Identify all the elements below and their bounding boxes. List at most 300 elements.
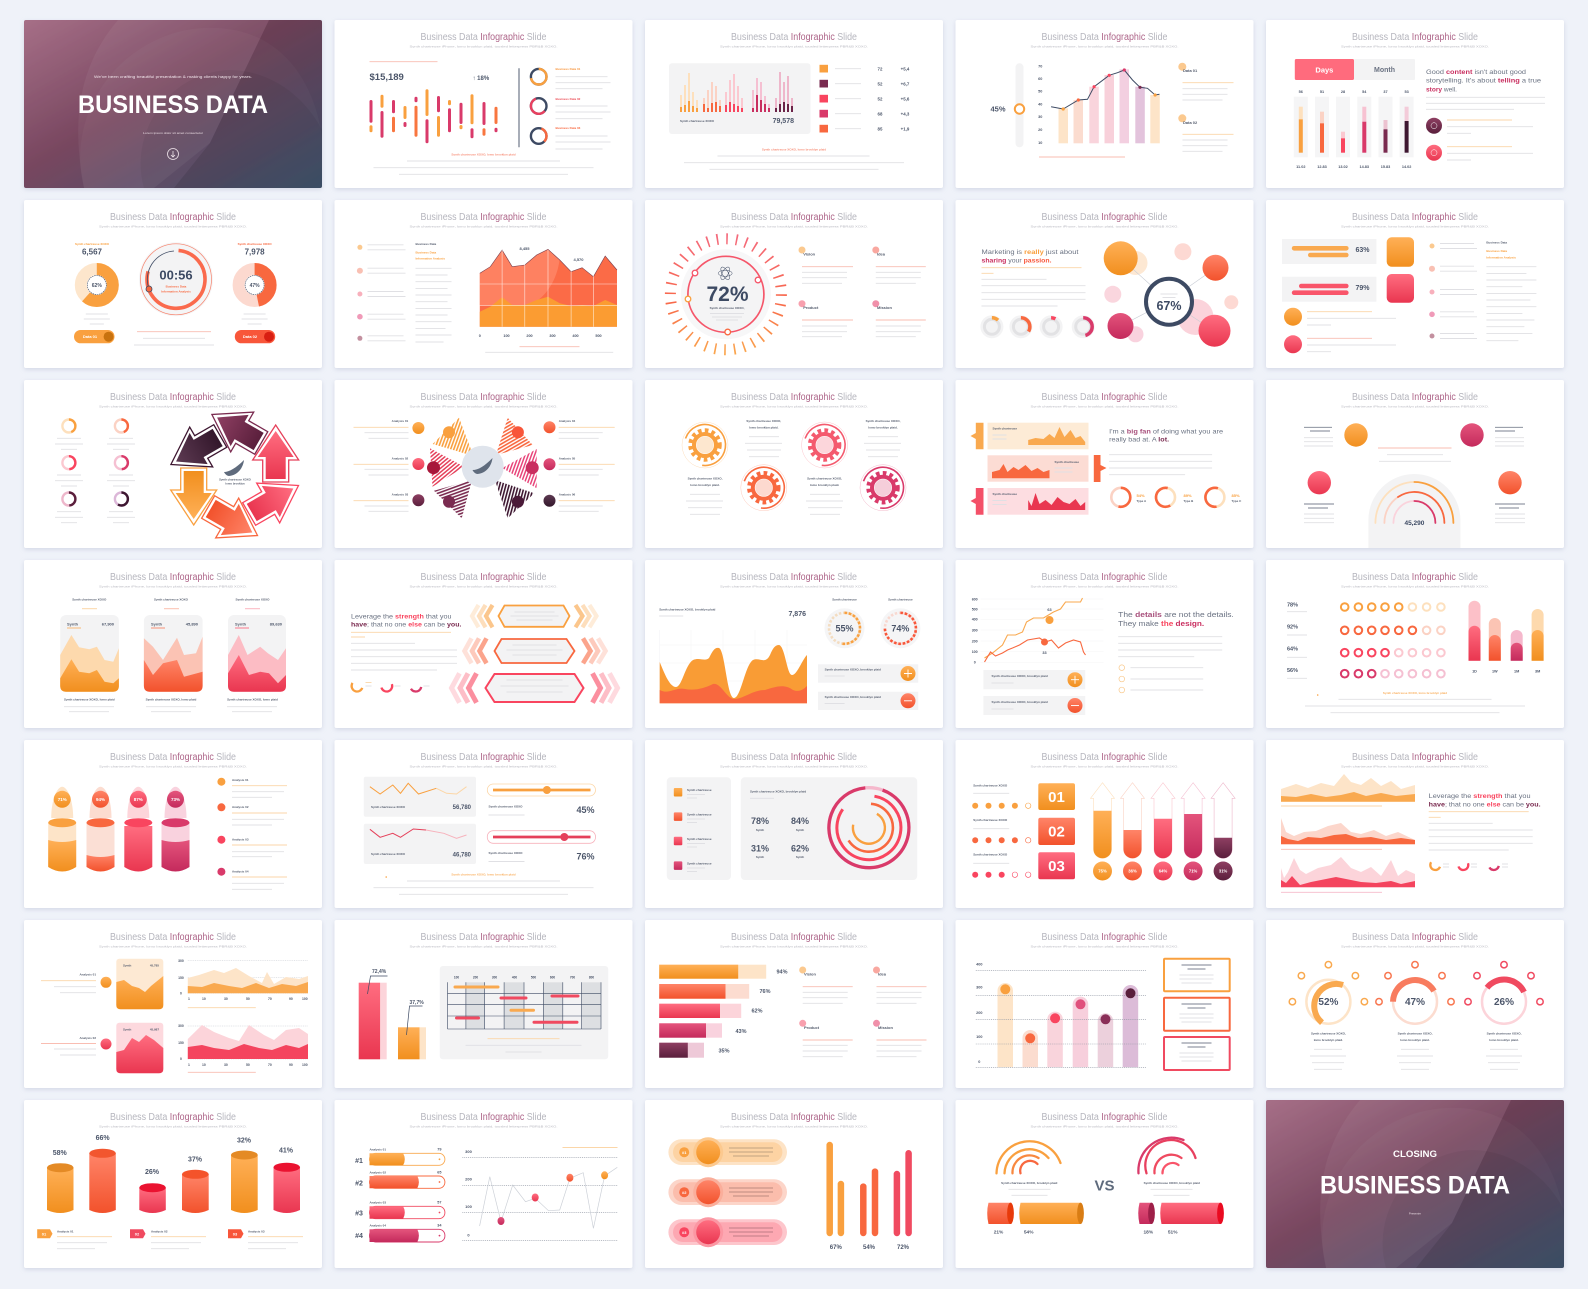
minus card: Synth chartreuse XOXO, brooklyn plaid (825, 695, 881, 699)
caption right: Synth chartreuse XOXO, brooklyn plaid (1144, 1181, 1200, 1185)
heading (99, 752, 247, 768)
striped triangles (427, 418, 539, 518)
area chart red: 1 (188, 1063, 190, 1067)
title: BUSINESS DATA (78, 91, 268, 119)
heading: Business Data Infographic Slide (420, 752, 547, 763)
legend card: Synth chartreuse (687, 788, 712, 792)
body text (1118, 637, 1222, 657)
area row coral (1281, 818, 1415, 849)
gauge 47% (1376, 962, 1454, 1024)
legend 03: 03 (233, 1232, 238, 1236)
heading (410, 752, 558, 768)
horizontal bar chart: 62% (751, 1009, 763, 1015)
panel: slide 33 pills and bar pairs (645, 1100, 943, 1268)
box text (1180, 965, 1214, 1061)
line chart: 500 (972, 607, 978, 611)
legend text (556, 67, 610, 149)
legend: data 01 (1178, 63, 1234, 100)
captions: lomo brooklyn plaid. (1489, 1038, 1519, 1042)
slider 76% (487, 831, 596, 862)
line chart: 200 (465, 1176, 473, 1182)
panel: slide 7 area chart (334, 200, 632, 368)
legend 01 (37, 1229, 112, 1249)
legend card: Synth chartreuse (687, 837, 712, 841)
heading: Business Data Infographic Slide (731, 752, 857, 763)
panel: slide 15 semicircle 45,290 (1266, 380, 1564, 548)
block: mission: Mission (878, 1025, 893, 1030)
legend 02: 02 (135, 1232, 140, 1236)
bar chart (1468, 601, 1544, 674)
cylinders left (987, 1203, 1084, 1224)
heading (99, 212, 247, 228)
percentage labels: 64% (1287, 647, 1298, 653)
icon list (1429, 244, 1477, 338)
table of values: 52 (878, 82, 883, 86)
gauge 47%: 47% (1405, 997, 1425, 1008)
bar chart with callouts: 37,7% (410, 1000, 424, 1006)
bar chart with callouts: 72,4% (372, 969, 387, 975)
values (994, 1230, 1178, 1236)
row 02: Synth chartreuse XOXO (973, 818, 1008, 822)
percentage badges: 75% (1098, 868, 1107, 874)
chart title (659, 608, 806, 618)
heading: Synth chartreuse iPhone, lomo brooklyn plaid, tousled letterpress PBR&B XOXO. (410, 404, 558, 408)
legend: analysis list: Analysis 02 (232, 805, 249, 809)
card red: 89,630 (270, 622, 283, 626)
percentage badges (1093, 862, 1233, 880)
bar pairs: 54% (863, 1245, 876, 1251)
percentage badges: 31% (1219, 868, 1228, 874)
axis labels (1038, 64, 1042, 145)
heading (410, 212, 558, 228)
heading: Business Data Infographic Slide (110, 752, 236, 763)
stats and rings card: 31% (751, 844, 769, 854)
bar chart: 0 (978, 1060, 980, 1064)
horizontal bar chart: 35% (718, 1048, 730, 1054)
bar pairs: 67% (830, 1245, 842, 1251)
heading (720, 212, 868, 228)
table of values: 72 (878, 66, 883, 72)
heading: Synth chartreuse iPhone, lomo brooklyn plaid, tousled letterpress PBR&B XOXO. (410, 584, 558, 588)
heading: Synth chartreuse iPhone, lomo brooklyn plaid, tousled letterpress PBR&B XOXO. (720, 44, 868, 48)
area chart: 500 (595, 334, 602, 338)
chevron row red (452, 673, 618, 703)
line chart: 600 (972, 597, 978, 601)
radial gauge (670, 239, 781, 350)
heading: Business Data Infographic Slide (420, 1112, 547, 1123)
body text (1426, 97, 1545, 109)
text column: Information Analysis (1486, 256, 1516, 260)
donut: left 62% (74, 242, 114, 343)
chart title: Synth chartreuse XOXO, brooklyn plaid (659, 608, 716, 612)
bar chart: 13.02 (1338, 165, 1348, 169)
pill 02 (668, 1177, 787, 1207)
icon row: red circle (1426, 145, 1533, 161)
strip 2 coral (988, 455, 1106, 482)
right labels: Analysis 04 (559, 419, 576, 423)
semicircle dome chart: 45,290 (1404, 520, 1425, 527)
gantt card: 800 (589, 976, 594, 980)
center text (1378, 448, 1452, 461)
center icon and label (219, 460, 252, 486)
headline quote: Good content isn't about good (1426, 69, 1527, 76)
caption left (1001, 1181, 1057, 1195)
heading (410, 392, 558, 408)
outlined boxes (1164, 959, 1230, 1070)
captions: Synth chartreuse XOXO, (1398, 1032, 1433, 1036)
pill 02: #2 (682, 1190, 687, 1195)
heading: Business Data Infographic Slide (1352, 752, 1478, 763)
panel: slide 16 three area cards (24, 560, 322, 728)
headline: Leverage the strength that you (351, 614, 452, 620)
small donuts (980, 315, 1095, 338)
axis labels: 30 (1038, 115, 1042, 119)
area chart orange: 90 (289, 997, 293, 1001)
block: idea (873, 966, 926, 1003)
bar chart: 53 (1404, 90, 1409, 94)
heading (720, 1112, 868, 1128)
values: 18% (1143, 1230, 1154, 1236)
text blocks: Synth chartreuse XOXO, (866, 419, 901, 423)
progress pill 4: #4 (355, 1233, 363, 1240)
card red: Synth chartreuse XOXO (235, 597, 270, 601)
stats and rings card: Synth chartreuse XOXO, brooklyn plaid (750, 790, 806, 794)
cylinder columns: 41% (279, 1148, 294, 1154)
heading: Business Data Infographic Slide (110, 212, 236, 223)
heading (1030, 32, 1179, 48)
heading: Business Data Infographic Slide (1352, 32, 1478, 43)
ring legend (62, 420, 128, 506)
area chart: 4,570 (573, 257, 584, 262)
stats and rings card: 84% (791, 816, 809, 826)
strip 3 red (970, 488, 1088, 515)
captions: lomo brooklyn plaid. (1314, 1038, 1343, 1042)
heading: Synth chartreuse iPhone, lomo brooklyn plaid, tousled letterpress PBR&B XOXO. (1030, 764, 1179, 768)
title: BUSINESS DATA (1320, 1172, 1510, 1200)
stats and rings card (741, 776, 920, 880)
area chart red (178, 1024, 308, 1072)
caption (485, 347, 613, 352)
card orange: Synth (67, 622, 79, 626)
caption left: Synth chartreuse XOXO, brooklyn plaid (1001, 1181, 1057, 1185)
text blocks: lomo brooklyn plaid. (868, 426, 898, 430)
body text (684, 148, 904, 169)
legend: data 02 (1178, 114, 1234, 151)
panel: slide 22 sparklines and sliders (334, 740, 632, 908)
heading (99, 1112, 247, 1128)
heading: Synth chartreuse iPhone, lomo brooklyn plaid, tousled letterpress PBR&B XOXO. (99, 764, 247, 768)
gantt card: 300 (492, 976, 497, 980)
heading: Business Data Infographic Slide (1352, 932, 1478, 943)
block: idea: Idea (877, 252, 886, 256)
area chart red: 150 (178, 1041, 184, 1045)
caption right (1144, 1181, 1200, 1195)
legend 01: Analysis 01 (57, 1230, 74, 1234)
stats and rings card: Synth (796, 855, 804, 859)
text column: Business Data (1486, 240, 1507, 244)
heading: Synth chartreuse iPhone, lomo brooklyn plaid, tousled letterpress PBR&B XOXO. (410, 44, 558, 48)
heading: Business Data Infographic Slide (731, 932, 857, 943)
donut: left 62%: Data 01 (83, 334, 98, 339)
card coral: 45,890 (186, 622, 199, 626)
icon list (357, 245, 406, 341)
heading (410, 932, 558, 948)
heading (99, 392, 247, 408)
stat card 63%: 63% (1355, 247, 1370, 254)
stats and rings card: Synth (756, 855, 764, 859)
icon row: plum circle (1426, 118, 1533, 134)
captions: Synth chartreuse XOXO, lomo plaid (146, 697, 197, 701)
cylinders right (1138, 1203, 1224, 1224)
heading: Synth chartreuse iPhone, lomo brooklyn plaid, tousled letterpress PBR&B XOXO. (1030, 944, 1179, 948)
body text (1305, 691, 1525, 713)
line chart: 300 (465, 1149, 473, 1154)
heading: Synth chartreuse iPhone, lomo brooklyn plaid, tousled letterpress PBR&B XOXO. (99, 224, 247, 228)
heading (720, 932, 868, 948)
gantt card: 600 (550, 976, 555, 980)
heading: Synth chartreuse iPhone, lomo brooklyn plaid, tousled letterpress PBR&B XOXO. (410, 1124, 558, 1128)
area chart red: 90 (289, 1063, 293, 1067)
heading (720, 32, 868, 48)
area row red (1281, 857, 1415, 892)
panel: slide 2 bars and donuts (334, 20, 632, 188)
legend: analysis list: Analysis 01 (232, 778, 249, 782)
headline: They make the design. (1118, 619, 1204, 628)
small rings (1111, 484, 1226, 510)
area chart orange (178, 959, 308, 1008)
arcs left (996, 1141, 1060, 1173)
donut: right 47% (235, 242, 275, 343)
card red (228, 597, 286, 692)
legend text: Business Data 02 (556, 97, 581, 101)
heading: Synth chartreuse iPhone, lomo brooklyn plaid, tousled letterpress PBR&B XOXO. (410, 944, 558, 948)
bar chart: 15.83 (1381, 165, 1390, 169)
right labels: Analysis 05 (559, 456, 576, 460)
captions: Synth chartreuse XOXO, (1311, 1032, 1346, 1036)
gantt card: 400 (512, 976, 517, 980)
label analysis 02: Analysis 02 (79, 1036, 96, 1040)
line chart: 100 (465, 1204, 473, 1209)
donut 74%: 74% (891, 624, 909, 634)
donut: right 47%: 7,978 (245, 248, 265, 256)
legend card (667, 777, 731, 880)
area chart red: 50 (246, 1063, 250, 1067)
legend text (55, 438, 135, 523)
panel: slide 11 arrow cycle (24, 380, 322, 555)
heading: Business Data Infographic Slide (110, 1112, 236, 1123)
slider 45%: Synth chartreuse XOXO (488, 804, 523, 808)
donut: left 62%: 62% (92, 283, 102, 289)
area chart (660, 630, 807, 703)
right labels: Analysis 06 (559, 492, 576, 496)
left labels (354, 419, 409, 511)
panel: slide 19 line chart (956, 560, 1254, 728)
slider 76%: Synth chartreuse XOXO (488, 851, 523, 855)
vs label: VS (1094, 1178, 1115, 1194)
cylinder columns: 32% (237, 1138, 252, 1144)
headline (1109, 428, 1223, 444)
progress pill 4: Analysis 04 (370, 1224, 386, 1228)
pill 01 (668, 1137, 787, 1167)
strip 1 orange: Synth chartreuse (992, 426, 1017, 430)
axis labels: 20 (1038, 128, 1042, 132)
heading: Synth chartreuse iPhone, lomo brooklyn plaid, tousled letterpress PBR&B XOXO. (1341, 404, 1489, 408)
legend 02 (130, 1229, 206, 1249)
text column: Information Analysis (416, 257, 445, 261)
block: vision (799, 966, 853, 1003)
legend: analysis list (217, 778, 287, 889)
headline (351, 614, 462, 628)
panel: slide 17 chevrons (334, 560, 632, 728)
area chart red: 70 (268, 1063, 272, 1067)
bar chart: 300 (976, 986, 982, 990)
table of values: +6,7 (901, 82, 910, 86)
donut 74% (880, 597, 920, 648)
captions: Synth chartreuse XOXO, (1487, 1032, 1522, 1036)
stat card 63% (1282, 237, 1414, 267)
block: vision (798, 246, 853, 283)
stat: value and change (370, 62, 490, 83)
heading: Synth chartreuse iPhone, lomo brooklyn plaid, tousled letterpress PBR&B XOXO. (99, 584, 247, 588)
block: vision: Vision (804, 972, 816, 976)
gauge 26% (1465, 962, 1543, 1024)
cylinder columns: 37% (188, 1156, 203, 1164)
block: mission: Mission (877, 305, 892, 310)
bar chart: 200 (976, 1011, 982, 1015)
strip 1 orange (970, 423, 1088, 449)
block: idea (872, 246, 926, 283)
headline quote: story well. (1426, 86, 1457, 94)
heading: Synth chartreuse iPhone, lomo brooklyn plaid, tousled letterpress PBR&B XOXO. (720, 584, 868, 588)
legend 02: Analysis 02 (151, 1230, 168, 1234)
heading: Synth chartreuse iPhone, lomo brooklyn plaid, tousled letterpress PBR&B XOXO. (1030, 224, 1179, 228)
caption (1039, 156, 1125, 158)
headline: Marketing is really just about (982, 249, 1079, 256)
ring labels: 85% (1232, 493, 1240, 498)
bar chart with callouts (359, 969, 426, 1059)
stat: value and change: $15,189 (370, 72, 404, 83)
card orange (116, 959, 163, 1009)
heading (99, 932, 247, 948)
percentage labels: 92% (1287, 625, 1298, 631)
axis labels: 60 (1038, 77, 1042, 81)
heading: Business Data Infographic Slide (420, 212, 547, 223)
stat: value and change: ↑ 18% (472, 76, 490, 82)
card red (116, 1023, 163, 1073)
thermometer arrows (1090, 783, 1235, 858)
heading: Business Data Infographic Slide (731, 212, 857, 223)
timer ring: 00:56 (159, 268, 193, 282)
label analysis 02 (41, 1036, 112, 1055)
body text (1429, 812, 1533, 850)
table of values (820, 65, 910, 132)
card coral (144, 597, 203, 692)
heading: Synth chartreuse iPhone, lomo brooklyn plaid, tousled letterpress PBR&B XOXO. (1030, 584, 1179, 588)
donut: right 47%: Synth chartreuse XOXO (238, 242, 272, 246)
left labels: Analysis 01 (392, 419, 409, 423)
icon circles (1308, 423, 1522, 494)
table of values: +1,9 (901, 126, 910, 132)
line chart: 33 (1042, 651, 1047, 655)
axis labels: 50 (1038, 90, 1042, 94)
minus card (818, 692, 918, 710)
heading: Business Data Infographic Slide (1042, 932, 1168, 943)
heading: Business Data Infographic Slide (110, 392, 236, 403)
values: 51% (1168, 1230, 1178, 1236)
heading: Synth chartreuse iPhone, lomo brooklyn plaid, tousled letterpress PBR&B XOXO. (99, 944, 247, 948)
percentage badges: 71% (1189, 868, 1198, 874)
axis labels: 70 (1038, 64, 1042, 68)
body text (982, 268, 1086, 306)
progress pill 2: #2 (355, 1180, 363, 1188)
bar chart card: 79,578 (773, 118, 794, 125)
bar pairs (830, 1145, 910, 1251)
body text: Synth chartreuse XOXO, lomo brooklyn plaid (451, 152, 516, 156)
heading: Business Data Infographic Slide (110, 932, 236, 943)
panel: slide 28 horizontal bars (645, 920, 943, 1088)
panel: slide 20 ring grid and bars (1266, 560, 1564, 728)
text blocks: lomo brooklyn plaid. (810, 483, 839, 487)
row 03 (972, 852, 1075, 879)
cylinder columns (47, 1135, 300, 1213)
panel: slide 34 versus (956, 1100, 1254, 1268)
area chart: 0 (479, 334, 481, 338)
percentage labels (1287, 602, 1307, 678)
values: 21% (994, 1230, 1004, 1236)
heading (1341, 392, 1489, 408)
line chart: 0 (467, 1232, 470, 1238)
heading (1030, 392, 1179, 408)
row 01: 01 (1048, 789, 1065, 806)
area chart orange: 70 (268, 997, 272, 1001)
block: product (799, 1020, 853, 1057)
legend text: Business Data 03 (556, 126, 581, 130)
card coral: Synth chartreuse XOXO (154, 597, 189, 601)
left labels: Analysis 03 (392, 492, 409, 496)
heading (1030, 932, 1179, 948)
heading: Business Data Infographic Slide (731, 32, 857, 43)
progress pill 1 (355, 1148, 445, 1165)
area chart orange: 0 (180, 992, 182, 996)
gears (679, 419, 909, 514)
horizontal bar chart (659, 965, 788, 1058)
panel: slide 24 thermometer arrows (956, 740, 1254, 908)
right dots (544, 421, 556, 507)
headline: really bad at. A lot. (1109, 437, 1169, 444)
bar chart: 14.83 (1360, 165, 1369, 169)
ring labels: Type A (1136, 499, 1147, 503)
table of values: +4,3 (901, 112, 910, 116)
text blocks: Synth chartreuse XOXO, (688, 476, 723, 480)
heading: Synth chartreuse iPhone, lomo brooklyn plaid, tousled letterpress PBR&B XOXO. (720, 764, 868, 768)
body text (351, 632, 457, 670)
panel: slide 27 bars and gantt (334, 920, 632, 1088)
heading: Synth chartreuse iPhone, lomo brooklyn plaid, tousled letterpress PBR&B XOXO. (720, 404, 868, 408)
donut legend (528, 69, 550, 146)
panel: slide 30 arc gauges (1266, 920, 1564, 1088)
axis labels: 40 (1038, 102, 1042, 106)
cylinder 94% (86, 787, 114, 872)
bar chart: 37 (1383, 90, 1388, 94)
heading (410, 32, 558, 48)
cylinder 73%: 73% (171, 797, 180, 802)
block: product (798, 300, 853, 337)
progress pill 3: Analysis 03 (370, 1200, 386, 1204)
donut: left 62%: 6,567 (82, 248, 103, 256)
heading: Synth chartreuse iPhone, lomo brooklyn plaid, tousled letterpress PBR&B XOXO. (99, 404, 247, 408)
cylinder 87%: 87% (134, 797, 143, 802)
heading: Business Data Infographic Slide (420, 32, 547, 43)
